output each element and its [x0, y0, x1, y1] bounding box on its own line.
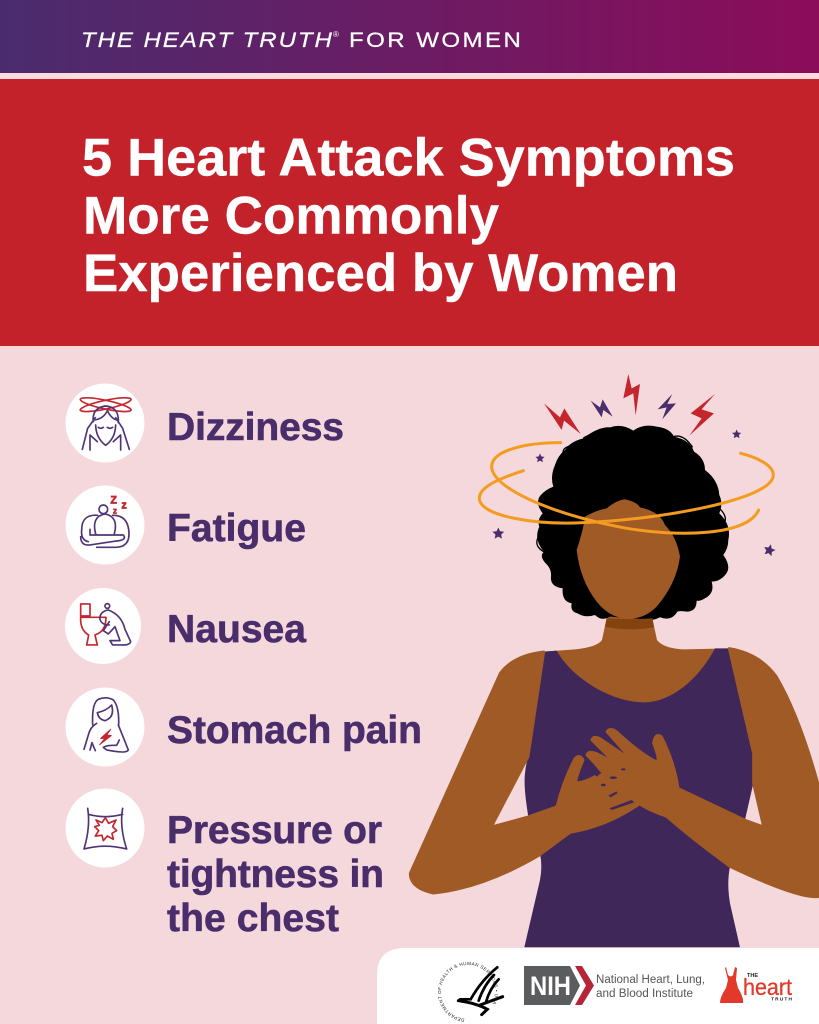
label text	[167, 809, 384, 940]
dizziness rings	[479, 443, 773, 533]
logo: HHS seal: DEPARTMENT OF HEALTH & HUMAN SERVICES • USA	[438, 962, 498, 1022]
logo: NIH: NIH	[530, 971, 571, 1001]
icon: woman with stomach pain	[84, 698, 128, 752]
icon: person at toilet	[81, 604, 131, 645]
title: 5 Heart Attack Symptoms	[82, 128, 735, 188]
title	[82, 128, 735, 303]
face	[577, 499, 680, 618]
icon: resting head: z	[121, 500, 127, 512]
symptom: chest pressure	[66, 788, 384, 940]
logo: The Heart Truth	[720, 967, 793, 1003]
symptom: nausea: Nausea	[167, 608, 306, 651]
logo: The Heart Truth: heart	[743, 974, 793, 1000]
logo: NIH	[524, 966, 705, 1005]
icon: resting head	[81, 494, 129, 547]
lightning bolts	[544, 374, 715, 436]
icon: resting head: z	[113, 506, 117, 515]
illustration: woman	[410, 374, 819, 947]
symptom: stomach pain: Stomach pain	[167, 709, 422, 752]
logo panel	[377, 948, 819, 1024]
head	[479, 374, 777, 629]
logo: NIH: National Heart, Lung,	[596, 974, 705, 986]
title panel	[0, 79, 819, 346]
header text	[81, 27, 521, 52]
symptom: dizziness: Dizziness	[167, 406, 344, 449]
title: More Commonly	[83, 186, 499, 246]
symptom: stomach pain	[66, 688, 422, 766]
header band	[0, 0, 819, 79]
icon: dizzy head	[79, 395, 132, 450]
icon: torso with burst	[84, 808, 127, 849]
symptom: fatigue	[66, 486, 306, 564]
title: Experienced by Women	[83, 244, 678, 303]
logo: The Heart Truth: THE	[747, 973, 758, 979]
stars	[492, 429, 777, 557]
label text: Pressure or	[167, 809, 382, 852]
icon: resting head: Z	[110, 494, 117, 506]
logo: NIH: and Blood Institute	[596, 988, 693, 1000]
header text: THE HEART TRUTH	[81, 27, 332, 52]
logo: The Heart Truth: TRUTH	[771, 996, 793, 1002]
symptom: fatigue: Fatigue	[167, 507, 306, 550]
symptom: nausea	[65, 588, 306, 664]
header text: FOR WOMEN	[349, 27, 521, 52]
arms and hands	[410, 648, 819, 897]
header text: ®	[333, 30, 339, 39]
symptom: dizziness	[66, 384, 344, 462]
torso and dress	[410, 617, 819, 947]
label text: tightness in	[167, 853, 384, 896]
hair	[537, 426, 729, 620]
label text: the chest	[167, 897, 339, 940]
